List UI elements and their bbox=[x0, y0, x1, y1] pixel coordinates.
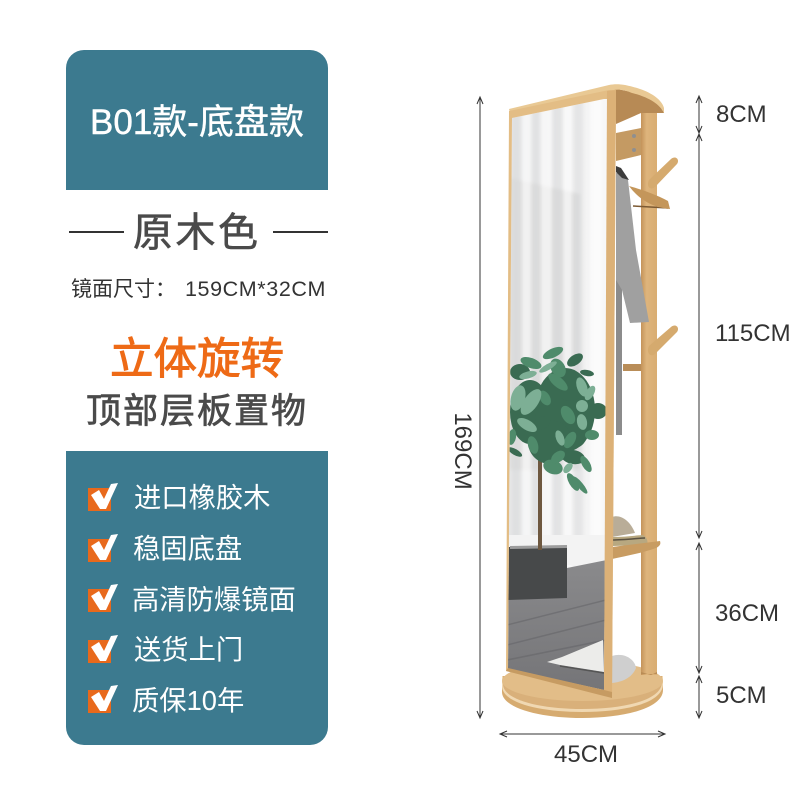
back bracket bbox=[616, 128, 641, 161]
icon: check bbox=[88, 685, 118, 713]
height dimension bbox=[477, 97, 483, 718]
floor bbox=[505, 560, 607, 695]
list item: stable base: 稳固底盘 bbox=[133, 533, 242, 564]
heading: model name: B01款-底盘款 bbox=[90, 103, 304, 142]
label: 36CM: 36CM bbox=[715, 600, 779, 627]
text: mirror size: 镜面尺寸： bbox=[71, 278, 176, 301]
sheer curtains bbox=[522, 107, 572, 566]
heading: colour name: 原木色 bbox=[133, 211, 260, 255]
lower rail bbox=[623, 364, 641, 371]
list item: home delivery: 送货上门 bbox=[134, 634, 243, 665]
label: 5CM: 5CM bbox=[716, 682, 767, 709]
icon: check bbox=[88, 483, 118, 511]
illustration: rotating mirror with coat rack bbox=[502, 84, 678, 718]
coat bbox=[616, 166, 649, 435]
hanger bbox=[629, 186, 670, 209]
label: 115CM: 115CM bbox=[715, 320, 791, 347]
36cm dimension bbox=[696, 543, 702, 673]
icon: check bbox=[88, 635, 118, 663]
base front lip bbox=[506, 668, 612, 698]
bracket screws bbox=[632, 134, 636, 152]
115cm dimension bbox=[696, 134, 702, 538]
cloth on base bbox=[612, 655, 636, 683]
wall bbox=[509, 100, 604, 690]
heading: rotation feature: 立体旋转 bbox=[110, 336, 284, 384]
label: 169CM: 169CM bbox=[449, 412, 476, 490]
width dimension bbox=[500, 731, 665, 737]
icon: check bbox=[88, 584, 118, 612]
list item: imported rubber wood: 进口橡胶木 bbox=[134, 482, 270, 513]
plant foliage bbox=[507, 344, 607, 495]
peg hook lower bbox=[648, 326, 678, 355]
mirror scene bbox=[505, 95, 610, 695]
rotating base bbox=[502, 661, 663, 718]
frame right side bbox=[604, 90, 616, 698]
text: mirror size bbox=[71, 277, 326, 301]
list item: HD explosion-proof mirror: 高清防爆镜面 bbox=[132, 584, 296, 615]
text: mirror size: 159CM*32CM bbox=[185, 277, 326, 301]
lower shelf bbox=[612, 541, 660, 559]
icon: check bbox=[88, 534, 118, 562]
8cm dimension bbox=[696, 96, 702, 133]
plant trunk bbox=[538, 455, 542, 550]
panel: model header bbox=[66, 50, 328, 190]
window shade bbox=[520, 186, 579, 470]
panel: feature list bbox=[66, 451, 328, 745]
top shelf bbox=[509, 84, 664, 124]
skirting bbox=[509, 535, 582, 547]
rear post bbox=[641, 112, 657, 675]
text: top shelf feature: 顶部层板置物 bbox=[86, 392, 308, 431]
peg hook upper bbox=[648, 158, 678, 188]
shelf stack of clothes bbox=[612, 516, 648, 546]
planter bbox=[507, 545, 567, 600]
magazine bbox=[547, 640, 604, 673]
list item: ten year warranty: 质保10年 bbox=[132, 685, 244, 716]
label: 8CM: 8CM bbox=[716, 101, 767, 128]
mirror frame bbox=[506, 90, 616, 698]
label: 45CM: 45CM bbox=[554, 741, 618, 768]
5cm dimension bbox=[696, 676, 702, 718]
